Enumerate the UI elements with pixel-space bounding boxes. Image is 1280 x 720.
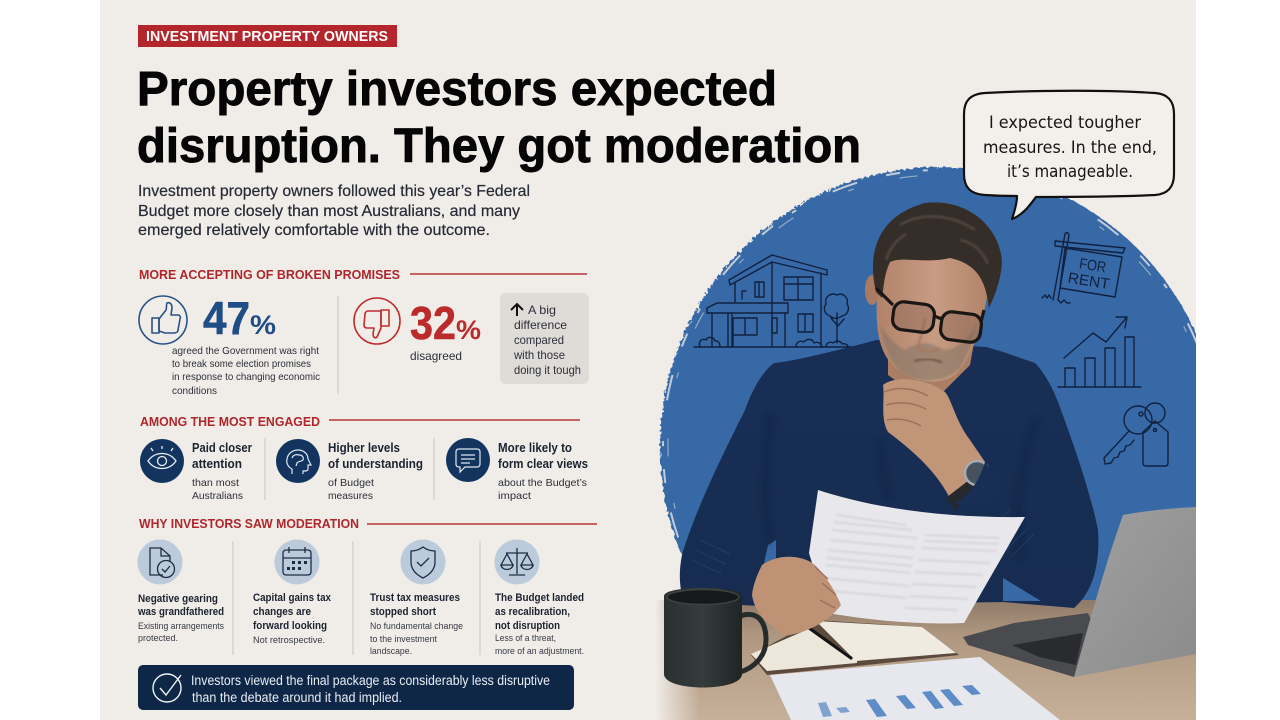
stat: 47% agreed: agreed the Government was right bbox=[172, 345, 319, 357]
icon: keys bbox=[1104, 403, 1168, 466]
section heading: why investors saw moderation: WHY INVESTORS SAW MODERATION bbox=[139, 516, 359, 531]
speech bubble: I expected tougher bbox=[989, 113, 1141, 132]
reason: negative gearing: Existing arrangements bbox=[138, 621, 224, 632]
raised hand bbox=[883, 379, 985, 503]
stat: 32% disagreed: 32 bbox=[410, 297, 456, 349]
reason: capital gains tax: Capital gains tax bbox=[253, 592, 332, 604]
item: more likely to form clear views: impact bbox=[498, 490, 531, 502]
ear bbox=[865, 275, 879, 305]
item: paid closer attention: Australians bbox=[192, 490, 243, 502]
banner: conclusion: Investors viewed the final package as considerably less disruptive bbox=[191, 673, 550, 688]
title bbox=[137, 63, 861, 173]
reason: negative gearing: protected. bbox=[138, 633, 178, 644]
watch bbox=[943, 461, 995, 511]
icon: house sketch bbox=[694, 255, 853, 347]
callout: a big difference: difference bbox=[514, 318, 567, 332]
reason: the budget landed: The Budget landed bbox=[495, 592, 584, 604]
reason: negative gearing: was grandfathered bbox=[137, 606, 224, 618]
item: higher levels of understanding: measures bbox=[328, 490, 373, 502]
stat: 47% agreed: % bbox=[250, 310, 276, 340]
reason: trust tax measures: stopped short bbox=[370, 606, 436, 618]
head bbox=[877, 242, 992, 382]
icon: for rent sign: RENT bbox=[1067, 270, 1111, 293]
reason: trust tax measures: landscape. bbox=[370, 646, 412, 657]
reason: capital gains tax: Not retrospective. bbox=[253, 635, 325, 646]
stat: 32% disagreed: % bbox=[456, 315, 481, 345]
reason: capital gains tax: changes are bbox=[253, 606, 311, 618]
item: more likely to form clear views: form clear views bbox=[498, 457, 588, 471]
stat: 32% disagreed: disagreed bbox=[410, 349, 462, 363]
item: paid closer attention: than most bbox=[192, 477, 239, 489]
neck bbox=[888, 343, 974, 405]
section heading: among the most engaged: AMONG THE MOST ENGAGED bbox=[140, 414, 320, 429]
photo: hand holding report bbox=[752, 557, 841, 636]
nose bbox=[918, 318, 939, 352]
photo: coffee mug bbox=[664, 588, 766, 688]
title: Property investors expected bbox=[137, 63, 777, 116]
pen bbox=[809, 628, 851, 658]
photo: desk bbox=[655, 600, 1196, 720]
icon: thumbs up bbox=[139, 296, 187, 344]
reason: trust tax measures bbox=[370, 540, 463, 657]
item: higher levels of understanding: Higher levels bbox=[328, 441, 400, 455]
callout: a big difference: compared bbox=[514, 333, 564, 347]
item: more likely to form clear views bbox=[446, 438, 588, 502]
reason: the budget landed bbox=[494, 540, 584, 657]
item: higher levels of understanding: of Budget bbox=[328, 477, 374, 489]
banner: conclusion bbox=[138, 665, 574, 710]
stat: 47% agreed bbox=[139, 292, 320, 397]
item: higher levels of understanding bbox=[276, 439, 423, 502]
mouth bbox=[914, 359, 942, 363]
reason: trust tax measures: Trust tax measures bbox=[370, 592, 460, 604]
tag: investment property owners: INVESTMENT PROPERTY OWNERS bbox=[146, 29, 388, 45]
callout: a big difference: doing it tough bbox=[514, 363, 581, 377]
icon: eye bbox=[140, 439, 184, 483]
reason: negative gearing: Negative gearing bbox=[138, 593, 218, 605]
icon: head with brain bbox=[276, 439, 320, 483]
reason: trust tax measures: to the investment bbox=[370, 634, 437, 645]
sleeve cuff bbox=[955, 462, 1003, 506]
icon: check circle bbox=[153, 674, 181, 702]
speech bubble: it’s manageable. bbox=[1007, 162, 1133, 181]
banner: conclusion: than the debate around it had implied. bbox=[192, 690, 402, 705]
icon: calendar bbox=[274, 540, 320, 584]
stat: 47% agreed: in response to changing economic bbox=[172, 371, 320, 383]
photo: bar chart document bbox=[770, 657, 1060, 720]
speech bubble bbox=[964, 91, 1174, 219]
reason: the budget landed: as recalibration, bbox=[495, 606, 570, 618]
icon: for rent sign bbox=[1042, 233, 1125, 303]
reason: negative gearing bbox=[137, 540, 224, 644]
intro text: emerged relatively comfortable with the outcome. bbox=[138, 222, 490, 239]
section heading: more accepting of broken promises: MORE ACCEPTING OF BROKEN PROMISES bbox=[139, 267, 400, 282]
icon: speech bubble bbox=[446, 438, 490, 482]
icon: thumbs down bbox=[354, 298, 400, 344]
item: more likely to form clear views: More likely to bbox=[498, 441, 572, 455]
reason: capital gains tax: forward looking bbox=[253, 620, 327, 632]
icon: scales bbox=[494, 540, 540, 584]
item: paid closer attention bbox=[140, 439, 252, 502]
sweater bbox=[680, 340, 1098, 608]
icon: for rent sign: FOR bbox=[1078, 255, 1107, 276]
stat: 47% agreed: to break some election promises bbox=[172, 358, 311, 370]
title: disruption. They got moderation bbox=[137, 120, 861, 173]
illustration: blue brush circle bbox=[659, 166, 1196, 600]
intro text: Budget more closely than most Australians, and many bbox=[138, 203, 520, 220]
stubble bbox=[880, 322, 978, 380]
photo: printed report held by man bbox=[809, 490, 1025, 623]
photo: notebook bbox=[751, 620, 959, 675]
hair bbox=[873, 202, 1002, 308]
item: paid closer attention: Paid closer bbox=[192, 441, 252, 455]
stat: 32% disagreed bbox=[354, 297, 481, 363]
reason: the budget landed: not disruption bbox=[495, 620, 560, 632]
photo: laptop bbox=[963, 507, 1196, 677]
reason: the budget landed: more of an adjustment. bbox=[495, 646, 584, 657]
photo: man reading bbox=[680, 202, 1098, 608]
reason: capital gains tax bbox=[253, 540, 332, 646]
intro text bbox=[138, 183, 530, 239]
tag: investment property owners bbox=[138, 25, 397, 47]
glasses bbox=[876, 288, 984, 343]
reason: trust tax measures: No fundamental change bbox=[370, 621, 463, 632]
stat: 47% agreed: conditions bbox=[172, 385, 217, 397]
icon: document with tick bbox=[138, 540, 182, 584]
icon: growth chart bbox=[1058, 317, 1141, 387]
item: higher levels of understanding: of understanding bbox=[328, 457, 423, 471]
icon: up arrow bbox=[511, 304, 523, 316]
item: more likely to form clear views: about the Budget’s bbox=[498, 477, 587, 489]
item: paid closer attention: attention bbox=[192, 457, 242, 471]
reason: the budget landed: Less of a threat, bbox=[495, 633, 556, 644]
intro text: Investment property owners followed this year’s Federal bbox=[138, 183, 530, 200]
stat: 47% agreed: 47 bbox=[203, 292, 250, 344]
callout: a big difference bbox=[500, 293, 589, 384]
speech bubble: measures. In the end, bbox=[983, 138, 1157, 157]
callout: a big difference: A big bbox=[528, 303, 556, 317]
callout: a big difference: with those bbox=[513, 348, 565, 362]
icon: shield bbox=[400, 540, 446, 584]
